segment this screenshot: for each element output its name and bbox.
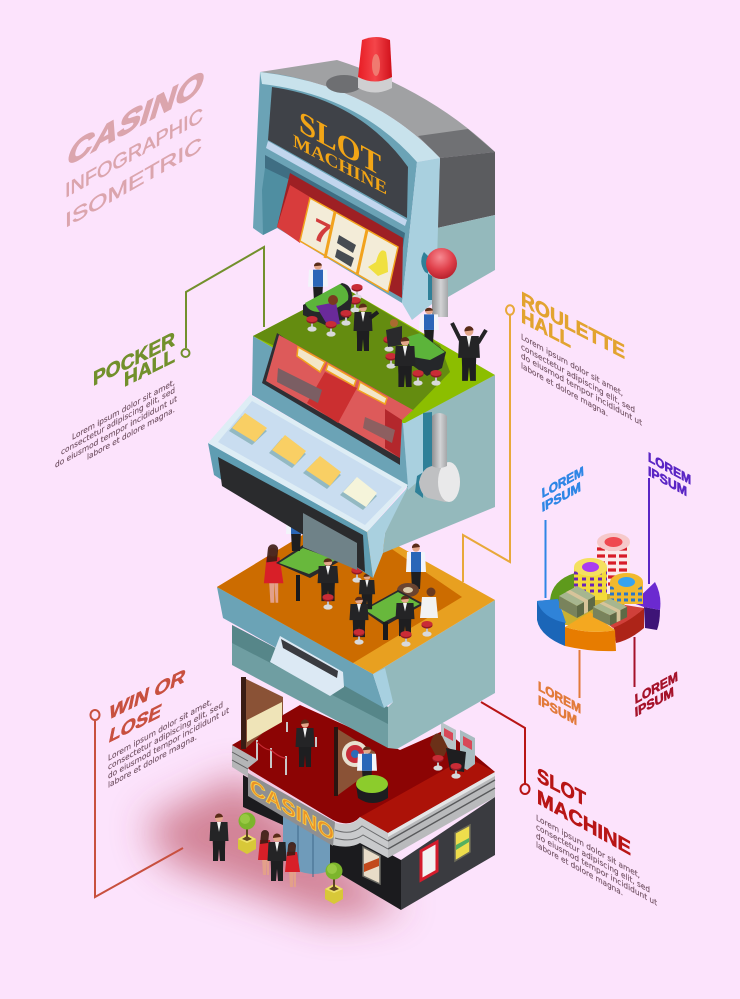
green poker hall people and tables bbox=[303, 262, 486, 387]
chart label: dark red bbox=[634, 668, 678, 720]
stool bbox=[353, 629, 365, 645]
chart label: blue: IPSUM bbox=[541, 478, 581, 515]
woman at table bbox=[386, 326, 402, 347]
stool bbox=[430, 370, 442, 386]
light pillar bbox=[402, 158, 440, 320]
reel fragment 2 bbox=[326, 364, 356, 386]
red screen shade bbox=[307, 372, 357, 423]
casino dealer bbox=[357, 746, 377, 785]
title: casino infographic isometric: CASINO bbox=[63, 62, 209, 175]
chart label: blue: LOREM bbox=[541, 463, 584, 501]
knob shadow bbox=[421, 252, 432, 300]
heading: pocker hall: HALL bbox=[124, 345, 175, 392]
casino neon sign: CASINO bbox=[250, 774, 334, 846]
stool right bbox=[450, 763, 462, 779]
roulette wheel on wall bbox=[342, 741, 368, 767]
chart label: dark red: IPSUM bbox=[634, 683, 674, 720]
text block: roulette hall: labore et dolore magna. bbox=[521, 361, 608, 420]
text block: win or lose: consectetur adipiscing elit, sed bbox=[108, 700, 223, 773]
deck rim bbox=[208, 395, 408, 532]
man center bbox=[354, 303, 372, 351]
text block: pocker hall: consectetur adipiscing elit, sed bbox=[61, 386, 175, 458]
text block: pocker hall: Lorem ipsum dolor sit amet, bbox=[72, 378, 175, 443]
orange roulette hall bbox=[217, 505, 495, 749]
reel bars bbox=[335, 235, 356, 267]
slot machine leader dot bbox=[520, 784, 530, 794]
pocker hall leader dot bbox=[182, 349, 190, 357]
roulette hall leader dot bbox=[506, 305, 514, 315]
pie chart with chips bbox=[537, 478, 660, 698]
coin tray slot bbox=[281, 639, 338, 678]
casino building bbox=[210, 677, 495, 910]
siren dome bbox=[358, 37, 392, 82]
knob stem bbox=[432, 272, 448, 317]
plant right bbox=[325, 862, 343, 904]
gray slot left bbox=[277, 368, 322, 403]
darker orange bbox=[217, 513, 462, 663]
man at barrier bbox=[296, 719, 314, 767]
roof bbox=[260, 60, 495, 158]
text block: roulette hall: consectetur adipiscing elit, sed bbox=[521, 342, 635, 416]
lever disk bbox=[438, 462, 460, 502]
chart label: purple: IPSUM bbox=[648, 463, 687, 499]
display sign text: SLOT bbox=[299, 104, 381, 184]
light pillar bbox=[403, 413, 423, 490]
text block: win or lose: labore et dolore magna. bbox=[108, 733, 197, 791]
reel window bbox=[277, 173, 403, 298]
button 4 bbox=[340, 477, 377, 510]
roulette hall leader line bbox=[463, 315, 510, 582]
table right bbox=[407, 333, 446, 376]
green wedge bbox=[550, 573, 590, 610]
front face bbox=[253, 72, 417, 303]
man arms up bbox=[452, 323, 486, 381]
heading: slot machine: MACHINE bbox=[537, 785, 631, 860]
right dark wall bbox=[401, 797, 495, 910]
stool bbox=[322, 594, 334, 610]
dealer behind bbox=[286, 505, 306, 551]
front lower face bbox=[208, 443, 373, 578]
silver band right bbox=[388, 772, 495, 858]
woman in red bbox=[264, 544, 283, 603]
text block: win or lose: do eiusmod tempor incididunt ut bbox=[108, 706, 230, 782]
stool behind bbox=[351, 567, 363, 583]
slot machine 1 bbox=[441, 722, 456, 752]
teal side bbox=[437, 215, 495, 297]
reel fragment 1 bbox=[297, 347, 325, 372]
ground shadow of casino bbox=[145, 775, 405, 920]
stool bbox=[385, 353, 397, 369]
poster window bbox=[363, 847, 380, 884]
gray slot right bbox=[363, 417, 395, 443]
man front left bbox=[350, 597, 368, 637]
blue wedge bbox=[537, 599, 565, 646]
poster yellow bbox=[455, 825, 470, 861]
reel bell bbox=[368, 250, 388, 276]
man outside bbox=[210, 813, 228, 861]
display bbox=[268, 87, 408, 218]
woman head bbox=[390, 319, 398, 327]
middle slot machine section bbox=[208, 288, 495, 578]
woman right bbox=[285, 842, 300, 887]
top slot machine head bbox=[253, 37, 495, 320]
title: casino infographic isometric: ISOMETRIC bbox=[65, 131, 202, 233]
chart label: purple: LOREM bbox=[648, 449, 691, 487]
rope bbox=[257, 742, 286, 758]
poker table left felt bbox=[305, 284, 348, 312]
woman purple bbox=[316, 302, 340, 326]
chart label: orange: IPSUM bbox=[538, 692, 577, 728]
dark recess top band bbox=[265, 155, 405, 247]
stool bbox=[400, 631, 412, 647]
title: casino infographic isometric bbox=[63, 62, 209, 233]
text block: pocker hall: do eiusmod tempor incididunt ut bbox=[55, 394, 178, 471]
stool back 1 bbox=[351, 284, 363, 300]
red screen bbox=[266, 335, 413, 458]
slot machine leader line bbox=[481, 702, 525, 784]
text block: roulette hall: Lorem ipsum dolor sit amet, bbox=[521, 332, 623, 399]
darker green bbox=[253, 288, 450, 410]
stool bbox=[412, 370, 424, 386]
lower teal left bbox=[232, 625, 388, 748]
reels bbox=[300, 198, 398, 292]
rope barrier bbox=[257, 722, 316, 775]
chip stack blue bbox=[610, 573, 643, 604]
red wedge bbox=[613, 608, 644, 643]
knob bbox=[426, 248, 457, 279]
pocker hall leader line bbox=[186, 247, 264, 348]
heading: win or lose bbox=[107, 664, 188, 748]
chart label: orange: LOREM bbox=[538, 678, 581, 716]
reel fragment 3 bbox=[358, 382, 387, 404]
left brown wall bbox=[242, 677, 283, 748]
text block: roulette hall: do eiusmod tempor incididunt ut bbox=[521, 351, 643, 429]
roulette wheel bbox=[397, 583, 419, 597]
lever base bbox=[419, 462, 460, 502]
chart label: dark red: LOREM bbox=[634, 668, 678, 707]
stool bbox=[340, 310, 352, 326]
woman left bbox=[258, 830, 273, 875]
green top bbox=[253, 288, 495, 423]
siren glare bbox=[372, 54, 380, 76]
title: casino infographic isometric: INFOGRAPHIC bbox=[65, 103, 203, 203]
plant left bbox=[238, 812, 256, 854]
reel seven: 7 bbox=[311, 211, 333, 253]
red screen dark bbox=[385, 409, 402, 458]
siren shadow bbox=[326, 75, 362, 93]
text block: slot machine: consectetur adipiscing elit, sed bbox=[536, 822, 650, 896]
red floor bbox=[232, 705, 495, 833]
players bbox=[430, 733, 448, 756]
orange wedge bbox=[565, 627, 616, 651]
woman head bbox=[426, 588, 436, 596]
text block: slot machine: labore et dolore magna. bbox=[536, 840, 623, 899]
left teal deck face bbox=[217, 587, 384, 708]
man center arm bbox=[370, 312, 378, 318]
floor bright strip bbox=[360, 757, 495, 833]
silver band left bbox=[232, 745, 258, 777]
siren base bbox=[358, 76, 392, 92]
dealer table felt bbox=[356, 775, 388, 793]
arch rim bbox=[260, 72, 440, 162]
dark side bbox=[437, 152, 495, 228]
stool bbox=[325, 321, 337, 337]
player dark bbox=[446, 748, 466, 772]
gray screen bbox=[303, 513, 357, 570]
glass door bbox=[283, 815, 330, 874]
table left bbox=[276, 545, 342, 578]
man seated left table bbox=[318, 558, 338, 601]
man seated bbox=[395, 337, 415, 387]
button 3 bbox=[303, 456, 341, 489]
display sign text: MACHINE bbox=[293, 131, 387, 200]
text block: slot machine: do eiusmod tempor incididunt ut bbox=[536, 831, 658, 909]
recess wall bbox=[262, 168, 290, 235]
button 1 bbox=[229, 413, 267, 445]
left red panel bbox=[277, 185, 310, 243]
yellow wedge bbox=[560, 585, 630, 625]
cash bundle right bbox=[593, 598, 627, 626]
text block: win or lose: Lorem ipsum dolor sit amet, bbox=[108, 697, 212, 764]
button 2 bbox=[269, 435, 306, 468]
stool back 2 bbox=[349, 297, 361, 313]
dealer right bbox=[419, 308, 439, 343]
text block: slot machine: Lorem ipsum dolor sit amet, bbox=[536, 813, 640, 881]
coin tray bbox=[270, 636, 344, 696]
right teal side bbox=[373, 600, 495, 749]
man with women bbox=[268, 833, 286, 881]
heading: roulette hall: HALL bbox=[521, 304, 571, 353]
poker table left base bbox=[303, 283, 352, 325]
silver band center bbox=[333, 817, 388, 858]
side panel bbox=[383, 375, 495, 553]
stool left bbox=[432, 755, 444, 771]
win or lose leader line bbox=[95, 721, 183, 897]
chip stack red bbox=[597, 533, 630, 594]
table right bbox=[362, 590, 424, 626]
light corner bbox=[373, 668, 393, 708]
cash bundle left bbox=[559, 586, 595, 618]
red screen recess bbox=[262, 333, 400, 465]
lever stem bbox=[432, 413, 447, 468]
chip stack purple bbox=[574, 558, 607, 600]
chart leader lines bbox=[546, 478, 649, 698]
table right felt bbox=[407, 333, 445, 360]
slot machine 2 bbox=[460, 730, 475, 770]
sign band bbox=[248, 773, 335, 846]
heading: roulette hall: ROULETTE bbox=[521, 287, 625, 364]
win or lose leader dot bbox=[90, 710, 100, 720]
stool bbox=[306, 316, 318, 332]
display ledge bbox=[266, 141, 407, 226]
heading: win or lose: LOSE bbox=[107, 699, 164, 748]
stool bbox=[421, 621, 433, 637]
man front right bbox=[396, 596, 414, 636]
light corner strip bbox=[367, 487, 408, 578]
stool bbox=[383, 336, 395, 352]
dark roof bbox=[418, 129, 495, 158]
poker dealer left bbox=[308, 262, 328, 301]
woman head bbox=[328, 295, 338, 305]
deck inner bbox=[218, 401, 402, 525]
heading: pocker hall: POCKER bbox=[93, 328, 175, 391]
left dark wall bbox=[243, 775, 401, 910]
upper front face bbox=[252, 336, 408, 487]
man back bbox=[359, 574, 375, 609]
heading: slot machine: SLOT bbox=[537, 763, 586, 811]
coin slot dark panel bbox=[218, 457, 365, 572]
right brown wall bbox=[336, 728, 375, 795]
heading: win or lose: WIN OR bbox=[107, 664, 188, 725]
text block: pocker hall: labore et dolore magna. bbox=[87, 405, 175, 463]
lever shadow bbox=[415, 412, 432, 498]
dealer table bbox=[356, 785, 388, 803]
purple wedge bbox=[633, 582, 660, 630]
woman in white bbox=[420, 597, 438, 618]
poster red bbox=[421, 842, 437, 880]
dealer right bbox=[406, 543, 426, 589]
orange top bbox=[217, 513, 495, 674]
